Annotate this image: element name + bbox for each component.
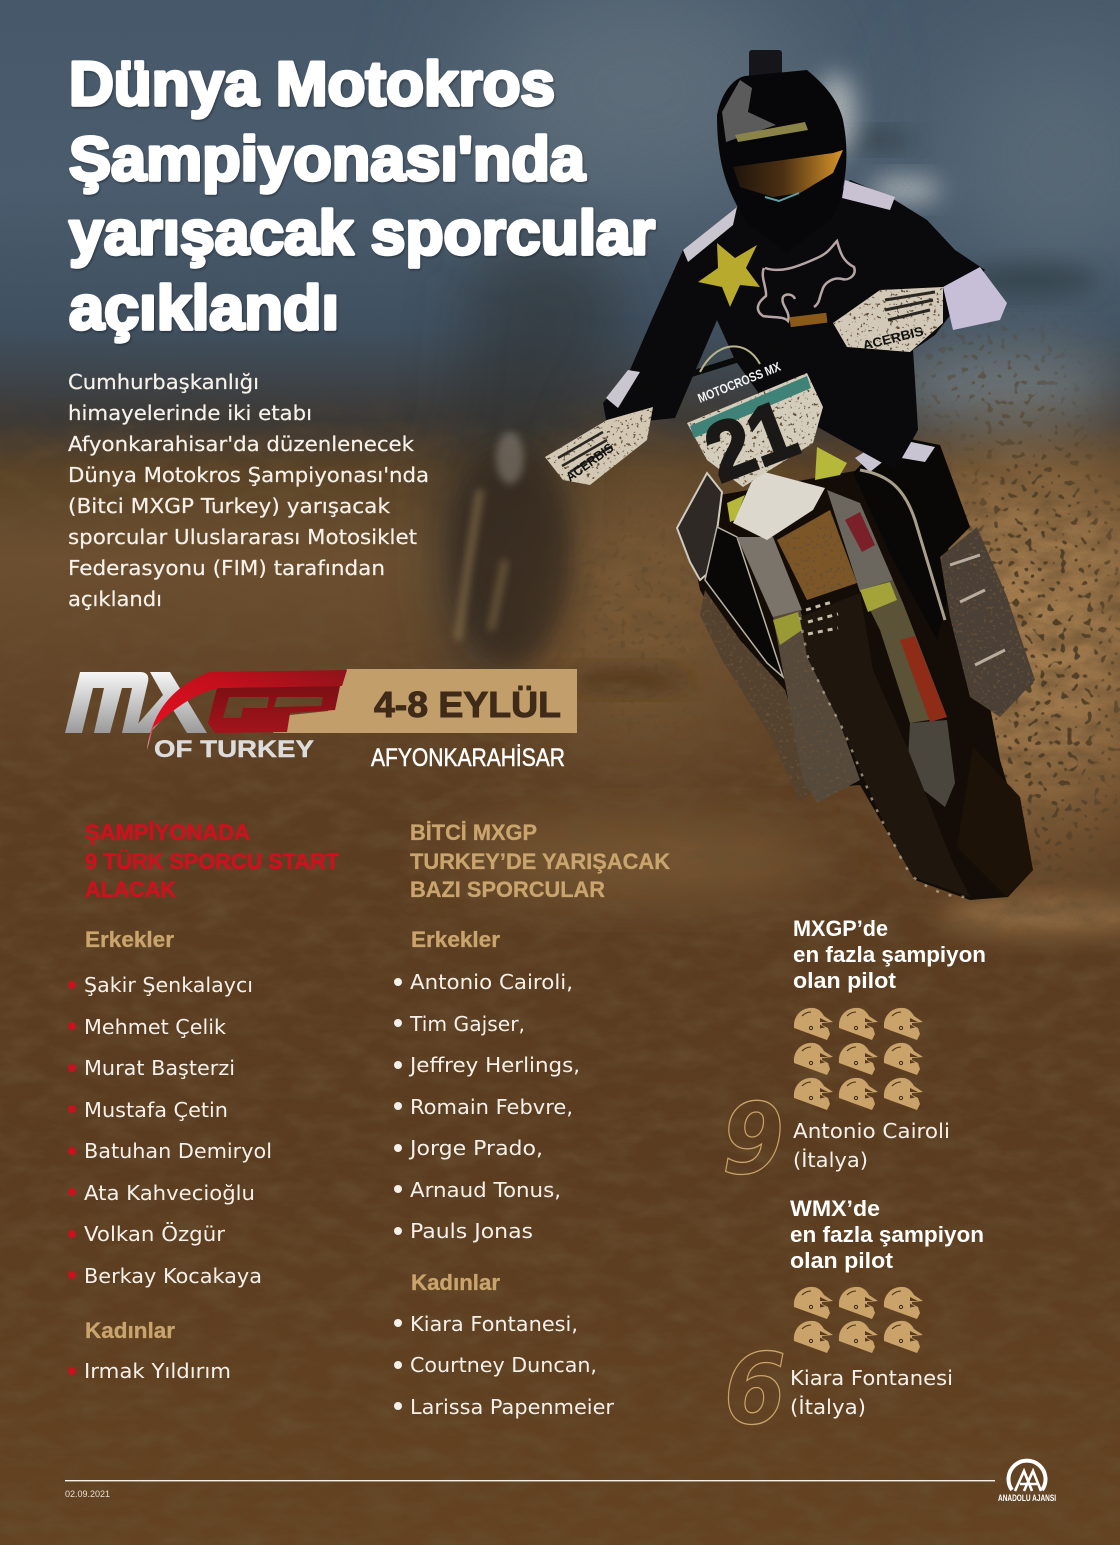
MXGP heading: olan pilot [793, 968, 897, 993]
yellow plastics [815, 447, 847, 480]
date: 02.09.2021 [65, 1489, 110, 1499]
list: Turkish men: Volkan Özgür [84, 1221, 226, 1246]
WMX heading: en fazla şampiyon [790, 1222, 984, 1247]
subheading: women, Turkish: Kadınlar [85, 1318, 175, 1343]
champion name: Antonio Cairoli [793, 1119, 950, 1143]
MXGP heading: en fazla şampiyon [793, 942, 986, 967]
right leg [853, 435, 970, 640]
subheading: women, foreign: Kadınlar [411, 1270, 500, 1295]
list: foreign men: Arnaud Tonus, [410, 1178, 561, 1202]
left knee brace [677, 473, 722, 580]
right fork lower [907, 720, 955, 807]
location label: AFYONKARAHİSAR [371, 743, 565, 772]
headlight [733, 470, 825, 540]
right fork yellow guard [860, 580, 947, 723]
right hand guard [833, 287, 943, 353]
heading: foreign riders: BİTCİ MXGP [410, 820, 537, 845]
WMX heading: WMX’de [790, 1196, 880, 1221]
title: Şampiyonası'nda [69, 125, 586, 194]
logo subtitle: OF TURKEY [154, 736, 314, 763]
champion name: Kiara Fontanesi [790, 1366, 953, 1390]
right thigh shin plate [860, 470, 945, 620]
list: Turkish men: Berkay Kocakaya [84, 1264, 262, 1288]
list: foreign men: Romain Febvre, [410, 1095, 573, 1119]
goggles [733, 150, 843, 197]
handlebar [640, 315, 850, 390]
subheading: men, foreign: Erkekler [411, 927, 500, 952]
rear wheel [957, 747, 1033, 897]
list: Turkish women: Irmak Yıldırım [84, 1359, 231, 1383]
intro text block: sporcular Uluslararası Motosiklet [68, 525, 417, 549]
number plate: 21 [694, 383, 809, 500]
list: foreign women [394, 1312, 615, 1419]
list: Turkish men: Mehmet Çelik [84, 1015, 226, 1039]
panel: MXGP champion [722, 916, 986, 1197]
number plate: MOTOCROSS MX [696, 359, 783, 406]
MXGP heading: MXGP’de [793, 916, 888, 941]
right fork upper [827, 490, 893, 592]
logo arc and letters [1008, 1461, 1046, 1491]
list: Turkish men: Ata Kahvecioğlu [84, 1181, 255, 1205]
heading: foreign riders [410, 820, 670, 902]
intro text block: Dünya Motokros Şampiyonası'nda [68, 463, 429, 487]
title: Dünya Motokros [69, 50, 555, 119]
intro text block: (Bitci MXGP Turkey) yarışacak [68, 494, 390, 518]
date banner: 4-8 EYLÜL [374, 684, 561, 725]
helmet camera [749, 50, 782, 82]
jersey star logo [698, 243, 760, 307]
left boot [700, 590, 815, 803]
champion name: (İtalya) [793, 1147, 868, 1172]
list: foreign women: Courtney Duncan, [410, 1353, 597, 1377]
helmet shell highlight [722, 80, 776, 142]
logo letter X [130, 672, 207, 733]
knee guard [855, 437, 935, 472]
helmet [717, 70, 846, 253]
logo letter M [65, 672, 148, 733]
champion name [790, 1366, 953, 1419]
left hand guard: ACERBIS [563, 440, 617, 484]
panel: WMX champion [724, 1196, 984, 1447]
right wrist sleeve [943, 267, 1007, 330]
right hand guard: ACERBIS [861, 323, 925, 353]
heading: Turkish riders [85, 820, 340, 902]
right shoulder patch [842, 180, 895, 210]
list: foreign women: Kiara Fontanesi, [410, 1312, 578, 1336]
pirelli badge on jersey [790, 313, 827, 327]
left sleeve white edge [606, 370, 640, 408]
intro text block: açıklandı [68, 587, 162, 611]
heading: Turkish riders: ALACAK [85, 877, 176, 902]
champion name [793, 1119, 950, 1172]
logo wordmark: ANADOLU AJANSI [998, 1493, 1056, 1503]
intro text block [68, 370, 429, 611]
number 6 outline: 6 [724, 1333, 786, 1447]
WMX heading [790, 1196, 984, 1273]
date banner [273, 669, 577, 733]
title [69, 50, 655, 343]
left shoulder white stripe [683, 207, 737, 262]
tyre top knobs [806, 602, 838, 634]
subheading: men, Turkish: Erkekler [85, 927, 174, 952]
left fork guard [773, 610, 860, 803]
torso jersey [603, 180, 985, 470]
list: foreign women: Larissa Papenmeier [410, 1395, 615, 1419]
blurred second rider in background [440, 240, 630, 690]
rider and motorcycle [545, 50, 1035, 900]
list: Turkish men [68, 973, 272, 1288]
list: Turkish men: Murat Başterzi [84, 1056, 235, 1080]
tyre knobs highlight [800, 617, 970, 897]
list: foreign men [394, 970, 580, 1243]
heading: foreign riders: TURKEY’DE YARIŞACAK [410, 849, 670, 874]
MXGP heading [793, 916, 986, 993]
champion name: (İtalya) [790, 1394, 866, 1419]
title: yarışacak sporcular [69, 199, 655, 268]
shroud [705, 527, 783, 677]
left fork tube [737, 537, 802, 622]
list: foreign men: Antonio Cairoli, [410, 970, 573, 994]
list: foreign men: Tim Gajser, [409, 1012, 525, 1036]
heading: foreign riders: BAZI SPORCULAR [410, 877, 605, 902]
jersey fox logo [758, 241, 855, 321]
WMX heading: olan pilot [790, 1248, 894, 1273]
logo red swoosh [147, 670, 347, 750]
right boot highlights [950, 555, 1005, 665]
Anadolu Ajansi logo [998, 1461, 1056, 1503]
intro text block: himayelerinde iki etabı [68, 401, 312, 425]
heading: Turkish riders: 9 TÜRK SPORCU START [85, 849, 340, 874]
muddy fender [777, 510, 857, 600]
list: foreign men: Pauls Jonas [410, 1219, 533, 1243]
front tyre [800, 593, 970, 897]
icon: six helmets [794, 1287, 923, 1353]
icon: nine helmets [794, 1008, 923, 1110]
intro text block: Cumhurbaşkanlığı [68, 370, 259, 394]
list: foreign men: Jorge Prado, [408, 1136, 543, 1160]
title: açıklandı [69, 274, 339, 343]
bike dark silhouette [690, 470, 1033, 900]
goggle teal trim [765, 193, 799, 201]
MXGP logo [65, 670, 347, 763]
list: Turkish men: Şakir Şenkalaycı [84, 973, 253, 997]
intro text block: Afyonkarahisar'da düzenlenecek [68, 432, 414, 456]
heading: Turkish riders: ŞAMPİYONADA [85, 820, 250, 845]
helmet decal [735, 122, 808, 142]
number 9 outline: 9 [722, 1083, 784, 1197]
list: Turkish men: Mustafa Çetin [84, 1098, 228, 1122]
list: foreign men: Jeffrey Herlings, [408, 1053, 580, 1077]
left hand guard [545, 407, 653, 485]
intro text block: Federasyonu (FIM) tarafından [68, 556, 385, 580]
logo letters GP [208, 686, 340, 733]
right boot [940, 527, 1035, 717]
list: Turkish men: Batuhan Demiryol [84, 1139, 272, 1163]
crossbar pad [700, 346, 760, 372]
